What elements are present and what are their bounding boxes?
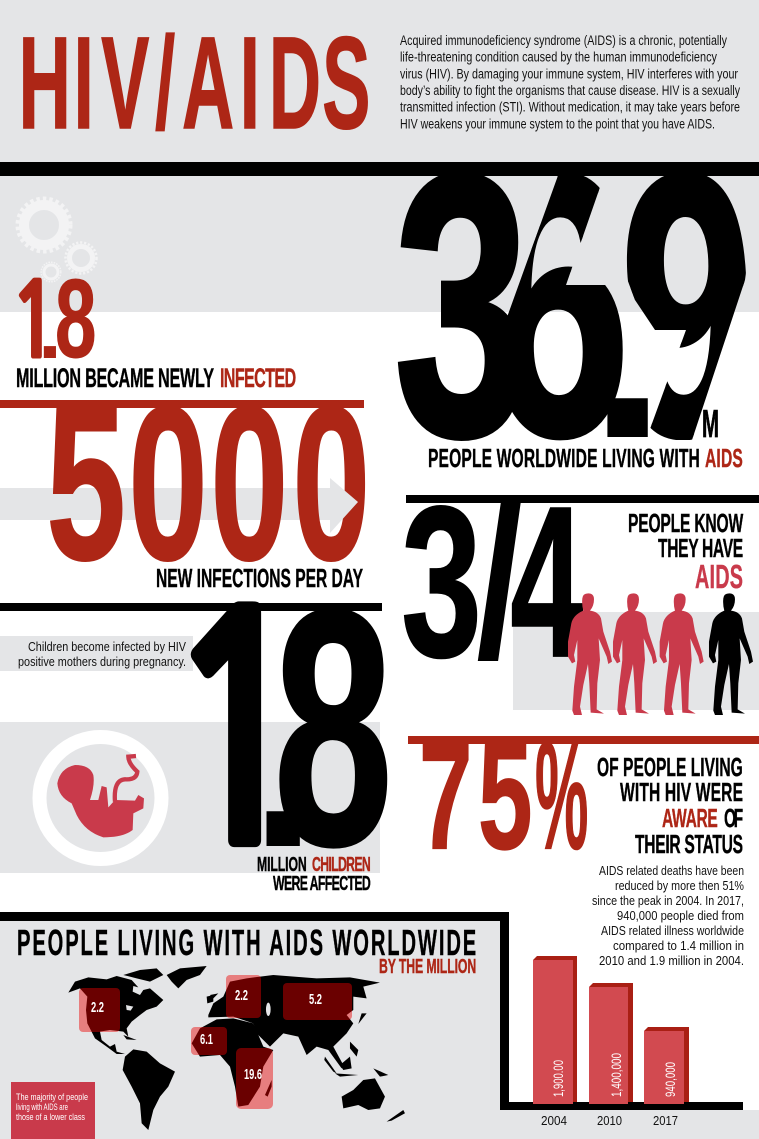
label: new infections per day: NEW INFECTIONS PER DAY xyxy=(156,564,363,593)
bar: 2004 xyxy=(533,956,577,1104)
map overlay: North America 2.2: 2.2 xyxy=(91,999,104,1016)
label: people know they have AIDS: AIDS xyxy=(695,558,743,595)
text block: children note: positive mothers during pregnancy. xyxy=(18,654,186,669)
black divider top xyxy=(0,162,759,176)
label: people know they have AIDS xyxy=(628,509,744,595)
axis labels: years: 2004 xyxy=(541,1113,567,1128)
text block: children note xyxy=(18,639,186,669)
label: million became newly infected: MILLION BECAME NEWLY xyxy=(16,363,214,393)
map overlay: North America 2.2 xyxy=(79,988,120,1032)
axis labels: years: 2017 xyxy=(653,1113,678,1128)
map overlay: Europe 2.2: 2.2 xyxy=(235,987,248,1004)
label: million children were affected xyxy=(257,853,371,895)
icon: fetus in white ring xyxy=(40,737,162,859)
map overlay: Europe 2.2 xyxy=(226,975,261,1018)
callout: majority lower class: living with AIDS are xyxy=(16,1102,68,1112)
label: million children were affected: WERE AFFECTED xyxy=(273,872,371,895)
bar: 2010 xyxy=(589,983,633,1104)
map overlay: Asia 5.2 xyxy=(283,983,352,1020)
red divider xyxy=(408,736,759,744)
panel: grey band behind figures xyxy=(513,612,759,710)
label: people know they have AIDS: THEY HAVE xyxy=(658,534,743,563)
statistic: 1.8 million newly infected xyxy=(9,257,96,382)
statistic: 3/4: 3 xyxy=(401,461,482,702)
map overlay: East and Southern Africa 19.6: 19.6 xyxy=(244,1066,262,1083)
frame: black chart axis and divider xyxy=(0,912,743,1110)
label: million became newly infected: INFECTED xyxy=(220,363,296,393)
panel: grey band behind children statistic xyxy=(0,722,380,873)
statistic: 1.8 million children: 8 xyxy=(273,540,393,915)
panel: grey band behind top statistics xyxy=(0,176,759,312)
label: people know they have AIDS: PEOPLE KNOW xyxy=(628,509,744,538)
arrow shaft xyxy=(0,488,331,520)
title: HIV/AIDS xyxy=(19,10,370,157)
statistic: 75%: % xyxy=(535,710,588,881)
statistic: 3/4: 4 xyxy=(510,462,583,702)
red divider xyxy=(0,400,364,408)
statistic: 5000 new infections: 0 xyxy=(292,361,370,605)
bar: 2010: 1,400,000 xyxy=(608,1053,624,1097)
label: of people living with HIV were aware of their status: OF PEOPLE LIVING xyxy=(597,753,743,782)
statistic: 1.8 million newly infected: 8 xyxy=(55,257,96,382)
statistic: 36.9 million: 9 xyxy=(620,99,754,514)
statistic: 36.9 million: . xyxy=(588,202,667,492)
label: million children were affected: MILLION xyxy=(257,853,307,876)
icon: virus particles xyxy=(18,198,96,282)
map overlay: East and Southern Africa 19.6 xyxy=(236,1048,273,1109)
arrow head xyxy=(330,478,358,533)
statistic: 1.8 million children xyxy=(160,540,393,915)
text block: introduction xyxy=(400,33,740,131)
panel: children note background xyxy=(0,636,193,671)
statistic: 36.9 million: 6 xyxy=(484,99,630,514)
icon: four human figures xyxy=(568,593,753,715)
heading: people living with AIDS worldwide: PEOPLE LIVING WITH AIDS WORLDWIDE xyxy=(17,924,476,964)
statistic: 5000 new infections: 5 xyxy=(46,362,126,606)
panel: header background xyxy=(0,0,759,162)
label: of people living with HIV were aware of their status: OF xyxy=(724,804,743,833)
bar: 2017 xyxy=(644,1027,689,1104)
text block: children note: Children become infected by HIV xyxy=(28,639,186,654)
statistic: 5000 new infections: 0 xyxy=(210,361,288,605)
text block: deaths reduced: compared to 1.4 million in xyxy=(613,938,744,953)
statistic: 75% xyxy=(419,710,588,882)
subheading: by the million: BY THE MILLION xyxy=(379,955,476,978)
axis labels: years xyxy=(541,1113,678,1128)
label: of people living with HIV were aware of their status: AWARE xyxy=(662,804,718,833)
callout: majority lower class xyxy=(11,1082,95,1139)
statistic: 36.9 million: 3 xyxy=(394,98,529,513)
statistic: 1.8 million newly infected: . xyxy=(38,286,62,375)
bar: 2017: 940,000 xyxy=(662,1062,678,1097)
label: M for million: M xyxy=(702,403,719,446)
statistic: 1.8 million children: . xyxy=(250,635,316,896)
map overlay: West Africa 6.1 xyxy=(191,1027,227,1055)
label: of people living with HIV were aware of their status: WITH HIV WERE xyxy=(620,778,743,807)
map overlay: Asia 5.2: 5.2 xyxy=(309,991,322,1008)
callout: majority lower class: The majority of people xyxy=(16,1092,88,1102)
statistic: 1.8 million children: 1 xyxy=(160,579,318,891)
bar: 2004: 1,900.00 xyxy=(550,1060,566,1097)
statistic: 75%: 7 xyxy=(419,711,472,882)
statistic: 3/4 xyxy=(401,461,583,702)
black divider xyxy=(0,603,382,611)
black divider xyxy=(406,495,759,503)
statistic: 36.9 million xyxy=(398,176,746,441)
label: million children were affected: CHILDREN xyxy=(312,853,371,876)
axis labels: years: 2010 xyxy=(597,1113,622,1128)
statistic: 1.8 million newly infected: 1 xyxy=(9,270,60,373)
callout: majority lower class: those of a lower class xyxy=(16,1112,85,1122)
statistic: 5000 new infections: 0 xyxy=(128,362,208,606)
label: people worldwide living with AIDS: PEOPLE WORLDWIDE LIVING WITH xyxy=(428,444,700,473)
label: people worldwide living with AIDS: AIDS xyxy=(705,444,743,473)
label: of people living with HIV were aware of their status xyxy=(597,753,743,859)
label: of people living with HIV were aware of their status: THEIR STATUS xyxy=(635,830,743,859)
panel: world map background xyxy=(0,921,759,1139)
world map xyxy=(68,966,405,1130)
bar chart: deaths by year xyxy=(533,956,689,1128)
map overlay: West Africa 6.1: 6.1 xyxy=(200,1031,213,1048)
statistic: 75%: 5 xyxy=(478,712,533,882)
text block: deaths reduced xyxy=(592,863,744,968)
statistic: 3/4: / xyxy=(477,466,521,701)
statistic: 5000 new infections xyxy=(46,361,370,606)
